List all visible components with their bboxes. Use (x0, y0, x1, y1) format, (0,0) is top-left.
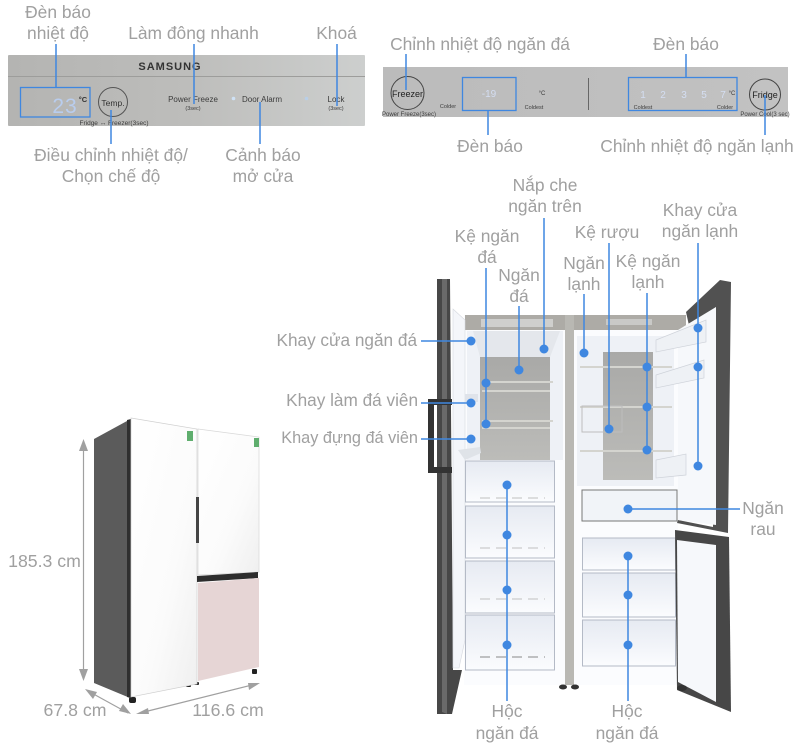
power freeze label: Power Freeze (168, 95, 218, 104)
callout: hộc ngăn đá (left): Hộc (492, 701, 523, 721)
callout: khay cửa ngăn đá: Khay cửa ngăn đá (276, 330, 417, 350)
callout: nắp che ngăn trên: ngăn trên (508, 196, 582, 216)
freezer button: Power Freeze(3sec) (382, 112, 436, 118)
handle (196, 497, 199, 543)
freezer compartment (458, 331, 563, 460)
freezer display (462, 78, 546, 111)
product image: open refrigerator (431, 279, 731, 714)
callout: kệ ngăn lạnh: Kệ ngăn (616, 251, 680, 271)
fridge button: Power Cool(3 sec) (740, 112, 790, 118)
callout: đèn báo ngăn lạnh (653, 34, 719, 77)
callout: khay đựng đá viên: Khay đựng đá viên (281, 429, 418, 447)
freezer button (382, 76, 456, 118)
callout: khay làm đá viên: Khay làm đá viên (286, 390, 418, 410)
callout: chỉnh nhiệt độ ngăn đá: Chỉnh nhiệt độ ngăn đá (390, 34, 570, 54)
callout: đèn báo ngăn đá (457, 110, 523, 156)
callout: cảnh báo mở cửa (225, 102, 301, 186)
callout: làm đông nhanh (128, 23, 259, 104)
top control band (465, 315, 686, 330)
temp button (80, 88, 148, 127)
upper right white door (198, 429, 259, 575)
callout: khoá (316, 23, 357, 106)
callout: cảnh báo mở cửa: mở cửa (233, 166, 294, 186)
product image: closed refrigerator (94, 418, 259, 703)
left white door (131, 418, 197, 697)
fridge display: 7 (720, 90, 726, 101)
door handle (431, 402, 452, 470)
feet (129, 669, 257, 703)
callout: ngăn rau (624, 498, 784, 539)
callout: ngăn đá: Ngăn (498, 265, 540, 285)
callout: đèn báo ngăn lạnh: Đèn báo (653, 34, 719, 54)
callout: kệ ngăn đá: Kệ ngăn (455, 226, 519, 246)
callout: làm đông nhanh: Làm đông nhanh (128, 23, 259, 43)
centre divider (559, 315, 579, 690)
callout: kệ rượu (575, 222, 639, 434)
right upper door (656, 280, 731, 533)
power freeze label: (3sec) (185, 106, 201, 112)
dimension: width: 116.6 cm (192, 700, 264, 720)
callout: điều chỉnh nhiệt độ: Điều chỉnh nhiệt độ/ (34, 145, 188, 165)
callout: điều chỉnh nhiệt độ (34, 110, 188, 186)
power freeze label (168, 95, 218, 112)
callout: kệ ngăn đá: đá (477, 247, 497, 267)
fridge lower drawers (582, 538, 676, 666)
fridge display (628, 78, 737, 111)
temp button: Temp. (101, 98, 125, 108)
callout: khay cửa ngăn lạnh: ngăn lạnh (662, 221, 738, 241)
callout: kệ ngăn lạnh: lạnh (632, 272, 664, 292)
control strip background (8, 55, 365, 126)
callout: hộc ngăn đá (left): ngăn đá (476, 723, 539, 743)
temp button: Fridge ↔ Freezer(3sec) (80, 120, 148, 127)
callout: ngăn đá (498, 265, 540, 374)
left door (431, 279, 465, 714)
lock label: Lock (328, 95, 345, 104)
dimension: height: 185.3 cm (8, 551, 81, 571)
freezer button: Colder (440, 104, 456, 110)
callout: khoá: Khoá (316, 23, 357, 43)
callout: khay cửa ngăn lạnh (662, 200, 738, 470)
lower pink door (198, 578, 259, 681)
fridge display: 1 (640, 90, 646, 101)
callout: hộc ngăn đá (right): Hộc (612, 701, 643, 721)
callout: nắp che ngăn trên (508, 175, 582, 354)
arrow: depth (85, 689, 131, 714)
panel: side-by-side control strip (8, 55, 365, 127)
arrow: width (136, 683, 260, 714)
callout: ngăn lạnh: Ngăn (563, 253, 605, 273)
right lower door (675, 530, 731, 712)
temperature display: °C (79, 95, 88, 104)
freezer display: -19 (482, 89, 497, 100)
fridge display: °C (729, 91, 736, 97)
callout: đèn báo nhiệt độ (25, 2, 91, 87)
fridge compartment (577, 336, 674, 486)
freezer display: Coldest (525, 105, 544, 111)
callout: đèn báo nhiệt độ: nhiệt độ (27, 23, 89, 43)
freezer drawers (466, 461, 554, 670)
callout: khay cửa ngăn lạnh: Khay cửa (663, 200, 738, 220)
energy labels (187, 431, 193, 441)
temperature display (20, 88, 90, 118)
temperature display: 23 (52, 95, 78, 118)
dimension: depth: 67.8 cm (44, 700, 106, 720)
callout: ngăn rau: Ngăn (742, 498, 784, 518)
callout: khay làm đá viên (286, 390, 476, 410)
callout: ngăn đá: đá (509, 286, 529, 306)
brand logo: SAMSUNG (138, 61, 202, 73)
cabinet body (464, 315, 678, 685)
callout: hộc ngăn đá (left) (476, 480, 539, 743)
fridge button (740, 79, 790, 118)
callout: ngăn lạnh: lạnh (568, 274, 600, 294)
fridge button: Fridge (752, 90, 778, 100)
callout: hộc ngăn đá (right) (596, 552, 659, 743)
callout: cảnh báo mở cửa: Cảnh báo (225, 145, 301, 165)
control strip background (383, 67, 788, 117)
arrow: height (79, 439, 88, 681)
fridge display: Coldest (634, 105, 653, 111)
freezer display: °C (539, 91, 546, 97)
callout: chỉnh nhiệt độ ngăn lạnh: Chỉnh nhiệt độ ngăn lạnh (600, 136, 794, 156)
fridge display: Colder (717, 105, 733, 111)
fridge display: 5 (701, 90, 707, 101)
freezer button: Freezer (392, 89, 423, 99)
lock label (305, 95, 345, 112)
door alarm label: Door Alarm (242, 95, 282, 104)
callout: ngăn rau: rau (750, 519, 776, 539)
panel: french-door control strip (382, 67, 790, 118)
side panel (94, 421, 130, 698)
callout: đèn báo nhiệt độ: Đèn báo (25, 2, 91, 22)
callout: kệ ngăn đá (455, 226, 519, 428)
lock label: (3sec) (328, 106, 344, 112)
fridge display: 2 (660, 90, 666, 101)
fridge display: 3 (681, 90, 687, 101)
callout: đèn báo ngăn đá: Đèn báo (457, 136, 523, 156)
callout: ngăn lạnh (563, 253, 605, 358)
vegetable drawer (582, 490, 677, 521)
callout: kệ ngăn lạnh (616, 251, 680, 454)
callout: hộc ngăn đá (right): ngăn đá (596, 723, 659, 743)
callout: điều chỉnh nhiệt độ: Chọn chế độ (62, 166, 160, 186)
callout: nắp che ngăn trên: Nắp che (513, 175, 577, 195)
callout: kệ rượu: Kệ rượu (575, 222, 639, 242)
dark gap (197, 572, 258, 582)
